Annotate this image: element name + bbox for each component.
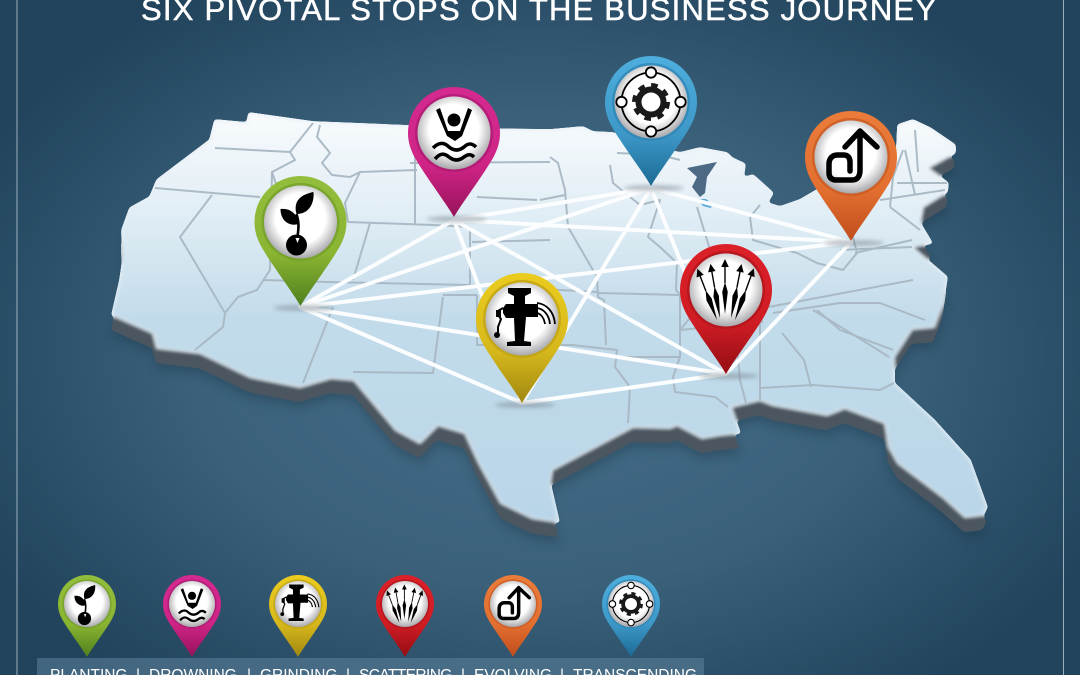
legend label bar	[37, 658, 704, 675]
pin: planting	[254, 176, 346, 311]
pin: evolving	[805, 111, 897, 246]
legend pin: planting	[58, 575, 116, 657]
pin: grinding	[476, 273, 568, 408]
pin: scattering	[680, 244, 772, 379]
legend pin: scattering	[376, 575, 434, 657]
pin: drowning	[408, 87, 500, 222]
legend pin: evolving	[484, 575, 542, 657]
legend pin: grinding	[269, 575, 327, 657]
legend pin: transcending	[602, 575, 660, 657]
map of the United States	[111, 113, 987, 543]
legend pin: drowning	[163, 575, 221, 657]
lake michigan	[687, 162, 717, 197]
connecting route lines	[300, 188, 851, 403]
pin: transcending	[605, 56, 697, 191]
